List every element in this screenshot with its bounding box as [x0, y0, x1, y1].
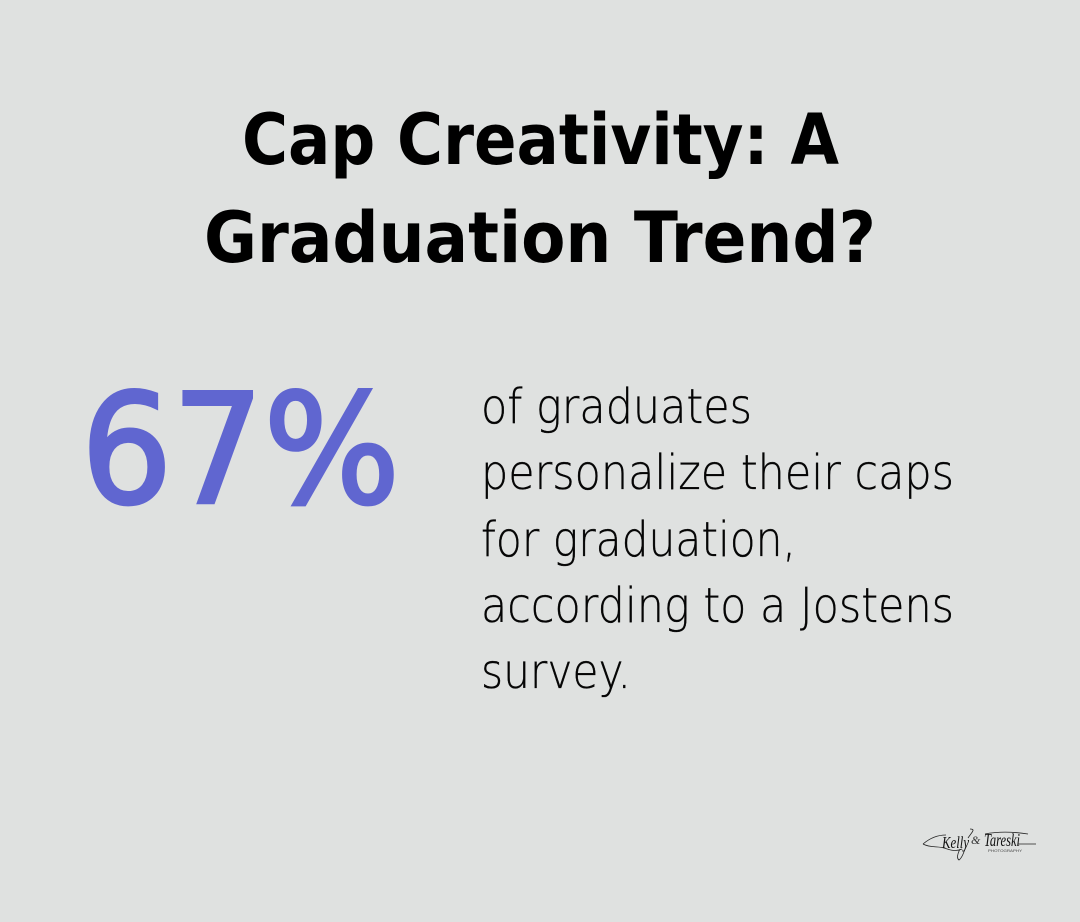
description text: of graduates — [481, 379, 752, 435]
logo: photographer signature — [923, 829, 1036, 860]
logo: photographer signature: Tareski — [984, 830, 1020, 850]
title: Graduation Trend? — [204, 197, 876, 279]
big statistic: 67%: 67% — [81, 362, 400, 538]
logo: photographer signature: & — [971, 833, 981, 847]
logo: photographer signature: Kelly — [941, 833, 969, 852]
title: Cap Creativity: A — [242, 99, 839, 181]
title — [204, 99, 876, 279]
description text: according to a Jostens — [481, 578, 954, 634]
description text: personalize their caps — [481, 445, 954, 501]
description text: for graduation, — [481, 512, 796, 568]
logo: photographer signature: PHOTOGRAPHY — [988, 849, 1023, 853]
description text: survey. — [481, 644, 631, 700]
description text — [481, 379, 954, 700]
